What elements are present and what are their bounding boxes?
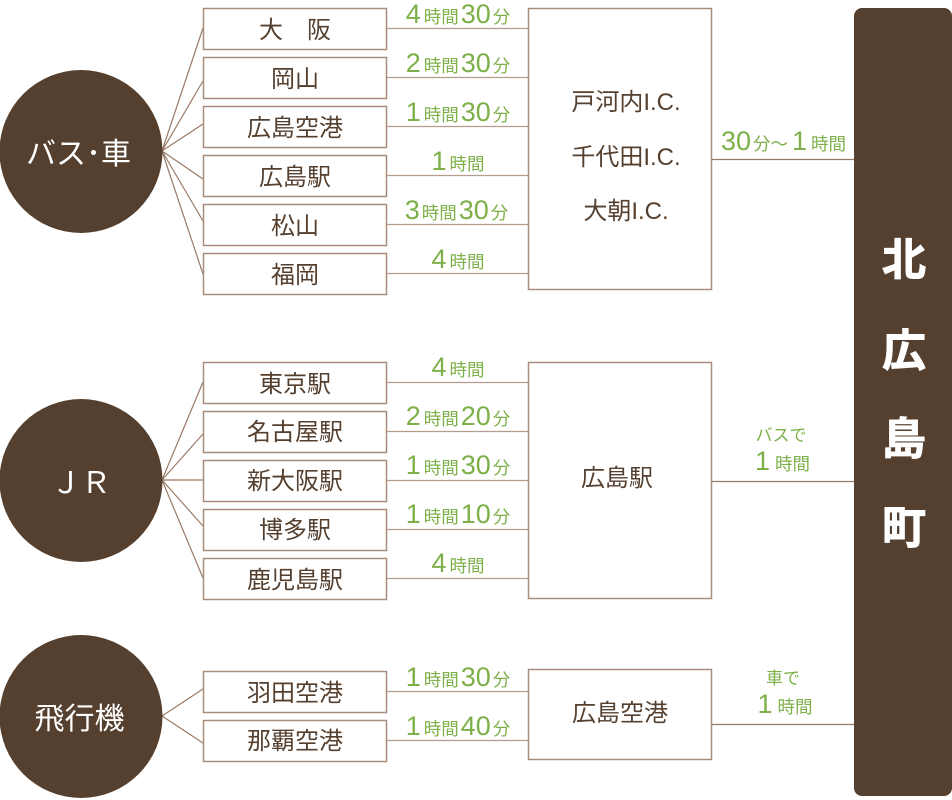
destination bar: Kitahiroshima Town: 町: [882, 504, 926, 553]
travel time labels: JR: 1時間30分: [406, 450, 511, 480]
origin boxes: bus and car: 岡山: [271, 66, 319, 93]
travel time labels: bus and car: 1時間30分: [406, 97, 511, 127]
panel: JR route: [0, 352, 854, 600]
origin boxes: JR: 鹿児島駅: [247, 567, 343, 594]
origin boxes: bus and car: 松山: [271, 213, 319, 240]
connector lines: airplane: [162, 689, 203, 743]
airport box: Hiroshima Airport: [528, 670, 712, 760]
final leg: airplane: 1 時間: [757, 689, 813, 719]
connector lines: bus and car: [162, 28, 203, 274]
station box: Hiroshima Station: 広島駅: [581, 465, 653, 492]
airport box: Hiroshima Airport: 広島空港: [572, 700, 668, 727]
final leg: bus and car: 30分～1時間: [721, 126, 846, 156]
circle: bus and car: [0, 70, 162, 233]
circle: JR: [0, 399, 162, 562]
interchange box: 千代田I.C.: [571, 144, 681, 171]
travel time labels: bus and car: 1時間: [431, 146, 485, 176]
travel time labels: JR: [406, 352, 511, 578]
origin boxes: JR: 博多駅: [259, 517, 331, 544]
origin boxes: bus and car: 広島駅: [259, 164, 331, 191]
origin boxes: JR: 名古屋駅: [247, 419, 343, 446]
travel time labels: JR: 4時間: [431, 352, 485, 382]
travel time labels: JR: 4時間: [431, 548, 485, 578]
destination bar: Kitahiroshima Town: 島: [882, 415, 926, 464]
origin boxes: JR: 新大阪駅: [247, 468, 343, 495]
circle: airplane: 飛行機: [34, 703, 124, 736]
origin boxes: JR: 東京駅: [259, 371, 331, 398]
interchange box: 大朝I.C.: [583, 198, 669, 225]
panel: bus and car route: [0, 0, 854, 294]
circle: JR: ＪＲ: [51, 467, 111, 500]
origin boxes: airplane: 羽田空港: [247, 680, 343, 707]
final leg: JR: [712, 426, 854, 482]
origin boxes: airplane: [204, 672, 386, 762]
travel time labels: JR: 2時間20分: [406, 401, 511, 431]
travel time labels: bus and car: 4時間: [431, 244, 485, 274]
travel time labels: bus and car: 2時間30分: [406, 48, 511, 78]
origin boxes: bus and car: 福岡: [271, 262, 319, 289]
travel time labels: JR: 1時間10分: [406, 499, 511, 529]
destination bar: Kitahiroshima Town: 広: [882, 327, 926, 376]
travel time labels: airplane: 1時間40分: [406, 711, 511, 741]
travel time labels: airplane: [406, 662, 511, 741]
connector lines: JR: [162, 382, 203, 578]
final leg: JR: バスで: [756, 426, 806, 445]
panel: airplane route: [0, 635, 854, 798]
circle: bus and car: バス･車: [26, 138, 131, 171]
final leg: airplane: [712, 669, 854, 724]
destination bar: Kitahiroshima Town: 北: [882, 236, 926, 285]
origin boxes: bus and car: [204, 8, 386, 294]
origin boxes: airplane: 那覇空港: [247, 728, 343, 755]
origin boxes: bus and car: 大 阪: [259, 17, 331, 44]
travel time lines: bus and car: [387, 28, 528, 274]
travel time lines: JR: [387, 382, 528, 578]
station box: Hiroshima Station: [528, 362, 712, 598]
circle: airplane: [0, 635, 162, 798]
travel time lines: airplane: [387, 692, 528, 740]
origin boxes: bus and car: 広島空港: [247, 115, 343, 142]
final leg: JR: 1 時間: [755, 446, 810, 476]
origin boxes: JR: [204, 362, 386, 600]
travel time labels: airplane: 1時間30分: [406, 662, 511, 692]
travel time labels: bus and car: [405, 0, 511, 274]
interchange box: 戸河内I.C.: [571, 89, 681, 116]
interchange box: [528, 8, 712, 290]
travel time labels: bus and car: 3時間30分: [405, 195, 509, 225]
destination bar: Kitahiroshima Town: [854, 8, 952, 796]
final leg: airplane: 車で: [766, 669, 800, 688]
